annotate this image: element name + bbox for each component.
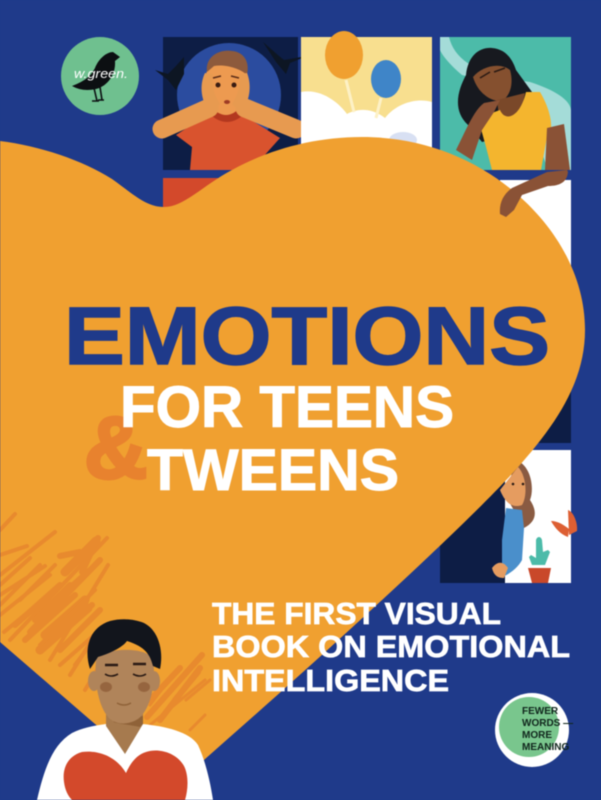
face	[473, 66, 512, 101]
panel: dark window	[500, 290, 571, 443]
hands	[202, 73, 250, 112]
panel: tired woman	[440, 37, 571, 170]
cheeks	[100, 682, 112, 692]
panel: peeking girl	[440, 450, 571, 583]
panel: white window	[500, 180, 571, 290]
icon: cactus	[529, 537, 550, 565]
hair	[458, 48, 532, 142]
title: EMOTIONS	[64, 291, 550, 382]
sweater	[502, 508, 524, 577]
head	[205, 53, 247, 115]
ampersand: &	[84, 398, 148, 497]
subtitle line: for teens: FOR TEENS	[120, 375, 454, 440]
neck	[106, 700, 143, 754]
face	[96, 650, 154, 724]
neck	[212, 106, 242, 122]
scribble texture	[0, 514, 210, 730]
man with heart	[37, 619, 213, 800]
orange heart	[0, 137, 585, 788]
badge: fewer words more meaning: FEWER	[522, 706, 559, 717]
shirt	[478, 92, 551, 170]
closed eyes	[105, 674, 146, 676]
icon: butterfly	[551, 510, 577, 537]
arms	[162, 108, 296, 129]
red heart	[64, 751, 188, 800]
balloon strings	[346, 80, 381, 118]
badge: fewer words more meaning	[495, 693, 573, 767]
tagline: INTELLIGENCE	[212, 663, 449, 698]
icon: blue balloon	[371, 60, 401, 98]
icon: orange balloon	[325, 31, 363, 79]
icon: bats	[155, 42, 307, 90]
badge: fewer words more meaning: MEANING	[522, 742, 569, 753]
hair	[87, 619, 161, 669]
red block below boy	[163, 178, 223, 208]
shirt	[37, 724, 213, 800]
ears	[88, 671, 100, 691]
panel: scared boy	[155, 37, 307, 170]
tagline: BOOK ON EMOTIONAL	[212, 629, 570, 664]
shirt	[176, 113, 280, 170]
eyebrows	[105, 664, 146, 665]
publisher logo: w.green.	[74, 66, 128, 81]
light swoosh	[440, 37, 571, 170]
tagline: THE FIRST VISUAL	[212, 596, 501, 631]
badge: fewer words more meaning: WORDS —	[522, 718, 573, 729]
publisher logo	[61, 37, 139, 115]
panel: navy bar under woman	[440, 170, 571, 180]
face	[500, 467, 525, 506]
subtitle line: tweens: TWEENS	[147, 438, 399, 503]
panel: balloons	[301, 31, 432, 152]
hair	[207, 51, 248, 75]
clouds	[301, 91, 432, 152]
badge: fewer words more meaning: MORE	[522, 730, 552, 741]
woman's hand over heart	[500, 170, 568, 217]
tagline	[212, 596, 570, 698]
hair	[508, 462, 535, 528]
icon: flower pot	[528, 568, 551, 583]
leaning arm	[456, 100, 500, 160]
